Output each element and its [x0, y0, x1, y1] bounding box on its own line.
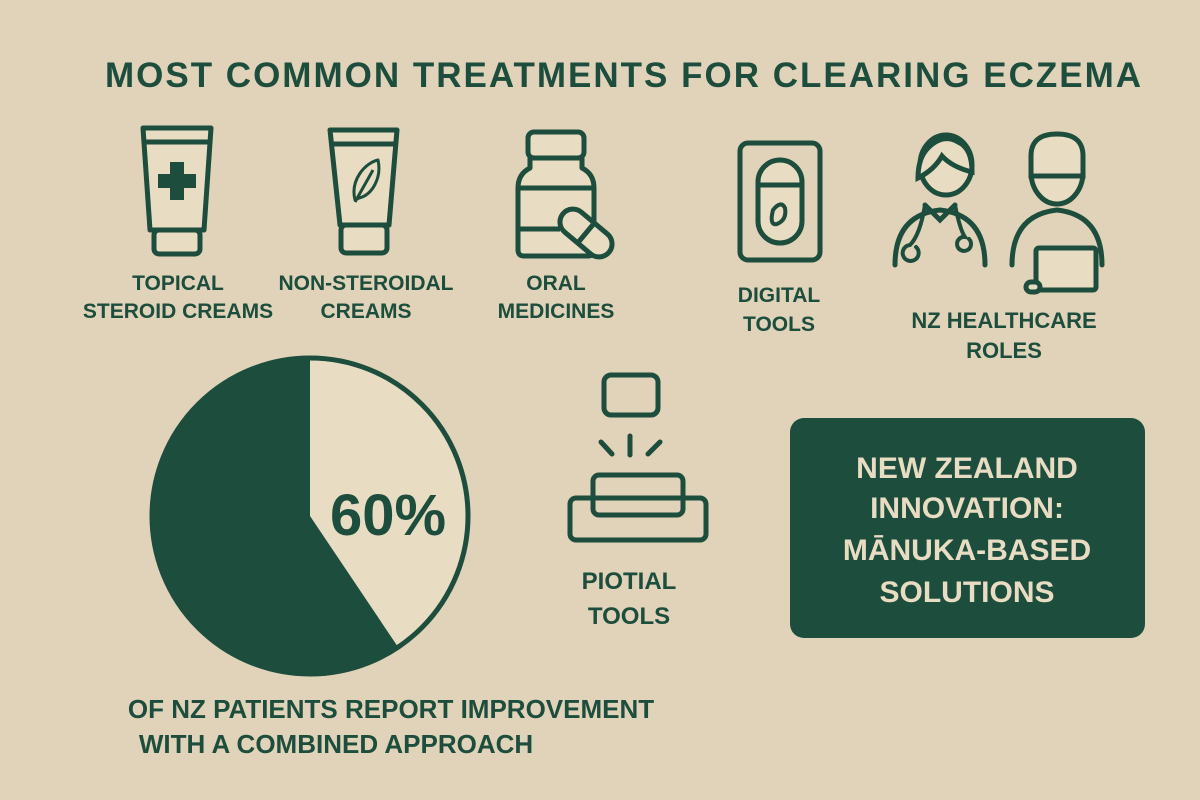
callout: NZ innovation: INNOVATION: — [870, 492, 1064, 525]
text: TOOLS — [588, 603, 670, 630]
pie chart: 60%: 60% — [330, 483, 446, 548]
label: NZ healthcare roles: NZ HEALTHCARE — [911, 308, 1097, 333]
pie chart: 60% — [152, 358, 468, 674]
title: MOST COMMON TREATMENTS FOR CLEARING ECZEMA — [105, 56, 1143, 95]
caption: pie: OF NZ PATIENTS REPORT IMPROVEMENT — [128, 694, 654, 724]
icon: NZ healthcare roles — [895, 134, 1102, 292]
callout: NZ innovation — [790, 418, 1145, 638]
icon: topical steroid cream tube — [143, 128, 211, 254]
callout: NZ innovation: NEW ZEALAND — [856, 452, 1078, 485]
text: STEROID CREAMS — [83, 300, 273, 323]
icon: digital tools device — [740, 143, 820, 260]
text: WITH A COMBINED APPROACH — [139, 729, 533, 759]
label: pictorial tools: PIOTIAL — [582, 568, 676, 595]
text: MEDICINES — [498, 300, 614, 323]
label: non-steroidal creams: NON-STEROIDAL — [278, 272, 454, 295]
icon: non-steroidal cream tube — [330, 130, 397, 253]
icon: oral medicine bottle with pill — [518, 132, 617, 262]
label: oral medicines: ORAL — [526, 272, 586, 295]
label: topical steroid creams: TOPICAL — [132, 272, 224, 295]
label: digital tools: DIGITAL — [738, 284, 820, 307]
callout: NZ innovation: MĀNUKA-BASED — [843, 534, 1091, 567]
callout: NZ innovation: SOLUTIONS — [879, 576, 1055, 609]
text: CREAMS — [320, 300, 412, 323]
text: TOOLS — [743, 313, 815, 336]
icon: device on stand — [570, 375, 706, 540]
text: ROLES — [966, 338, 1042, 363]
